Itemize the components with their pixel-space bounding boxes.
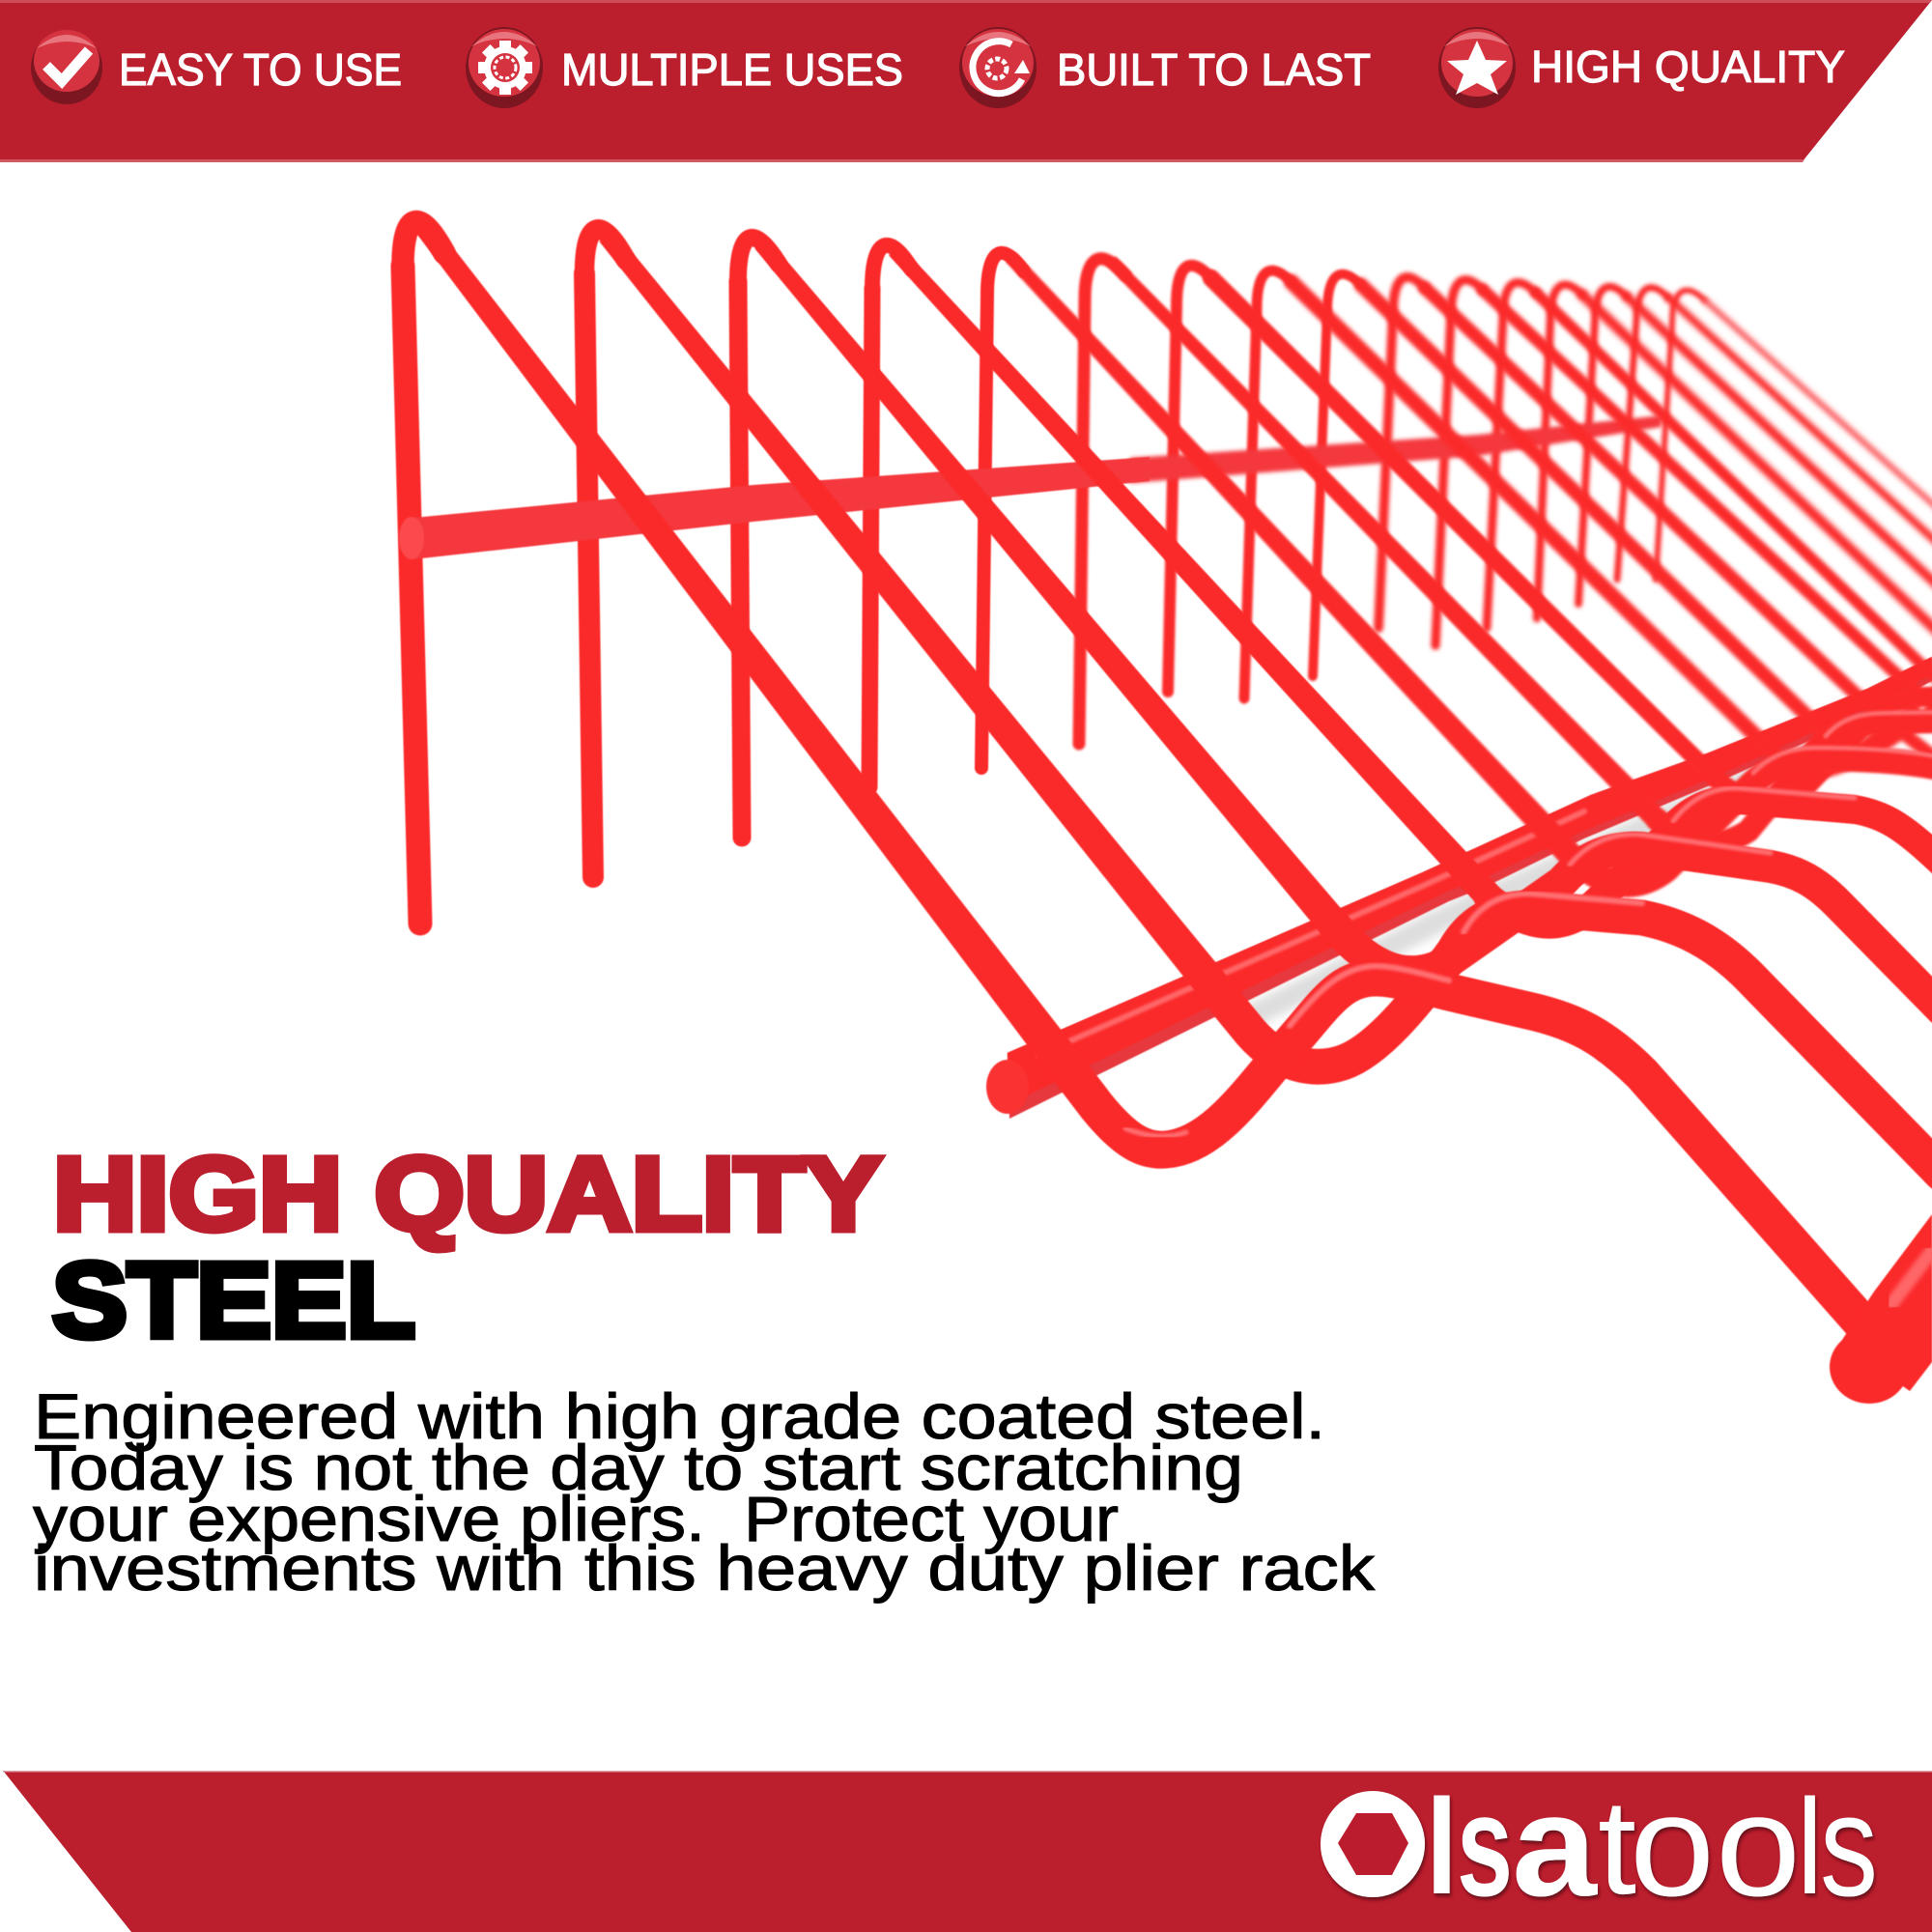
logo: Olsatools: o (1716, 1764, 1801, 1926)
diagonal wires, far (1582, 295, 1932, 636)
heading line: high quality: HIGH QUALITY (53, 1136, 882, 1252)
logo: Olsatools: s (1457, 1764, 1513, 1926)
rear legs, near (403, 222, 1024, 923)
wire 4 (889, 245, 1932, 924)
icon: circular arrow gear (959, 27, 1037, 108)
rear legs, far (1378, 277, 1705, 645)
body text: your expensive pliers. Protect your (33, 1483, 1119, 1554)
logo: Olsatools: l (1797, 1771, 1823, 1922)
rear crossbar (399, 415, 1662, 559)
wire 1, nearest (417, 222, 1869, 1331)
rear legs, middle (1079, 259, 1361, 744)
label: high quality: HIGH QUALITY (1531, 42, 1845, 92)
label: easy to use: EASY TO USE (119, 44, 402, 95)
heading (52, 1136, 882, 1360)
diagonal wires, mid-far (1292, 282, 1932, 771)
top banner (0, 0, 1932, 162)
wire 3 (755, 238, 1932, 1009)
bottom banner (3, 1771, 1932, 1932)
logo: Olsatools: t (1598, 1771, 1636, 1922)
wire 7 (1211, 278, 1932, 802)
logo: Olsatools (1321, 1764, 1878, 1926)
logo: Olsatools: o (1630, 1764, 1715, 1926)
wire 2 (599, 230, 1932, 1174)
front right rod end (1830, 1214, 1932, 1404)
floor shadow (1256, 715, 1893, 1014)
logo letter O with hexagon: O (1325, 1771, 1420, 1922)
body text: investments with this heavy duty plier rack (34, 1532, 1376, 1604)
icon: star (1438, 27, 1516, 108)
label: multiple uses: MULTIPLE USES (561, 44, 903, 95)
body text: Engineered with high grade coated steel. (34, 1380, 1325, 1452)
label: built to last: BUILT TO LAST (1057, 44, 1371, 95)
icon: gear (466, 27, 543, 108)
wire 6 (1106, 257, 1932, 842)
body text (33, 1380, 1376, 1604)
product photo: red wire plier rack (399, 222, 1932, 1404)
wire 5 (1006, 252, 1932, 884)
icon: check mark (31, 30, 102, 104)
heading line: steel: STEEL (52, 1241, 415, 1360)
logo: Olsatools: a (1512, 1764, 1599, 1926)
logo: Olsatools: s (1820, 1764, 1878, 1926)
body text: Today is not the day to start scratching (34, 1432, 1243, 1503)
logo: Olsatools: l (1426, 1771, 1458, 1922)
front crossbar (986, 657, 1932, 1119)
